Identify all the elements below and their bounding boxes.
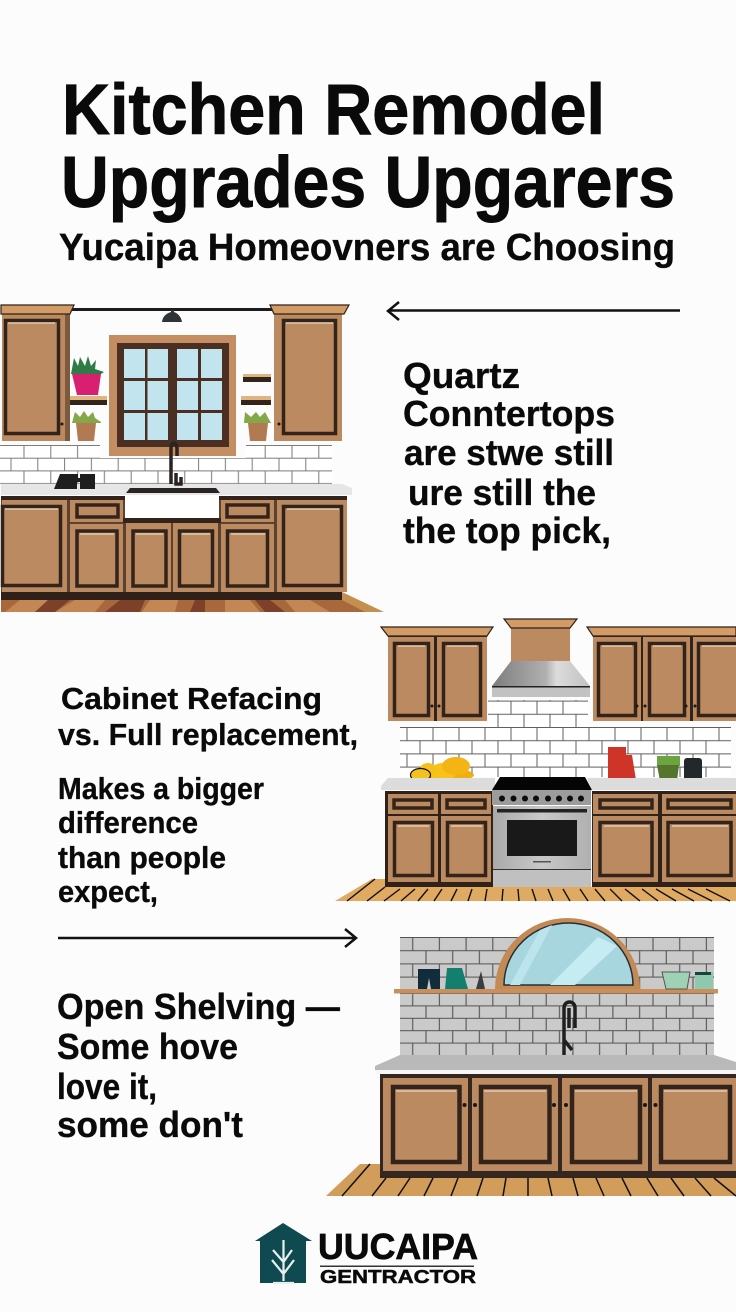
text: quartz countertops: ure still the <box>408 472 596 513</box>
illustration: kitchen with window and farmhouse sink <box>0 305 384 612</box>
text: quartz countertops: the top pick, <box>403 510 611 551</box>
shelf items right <box>662 972 713 989</box>
arrow: pointing right <box>58 929 356 947</box>
tile backsplash <box>400 700 731 777</box>
open shelf <box>394 989 718 994</box>
text: open shelving: some don't <box>57 1104 243 1145</box>
stovetop object <box>54 474 95 489</box>
text: open shelving <box>57 986 340 1145</box>
upper cabinets left <box>381 627 493 721</box>
red jug <box>608 747 636 780</box>
text: cabinet refacing <box>58 681 358 909</box>
text: cabinet refacing: Cabinet Refacing <box>61 681 322 716</box>
icon: house with tree <box>255 1223 312 1283</box>
arched mirror <box>495 918 640 989</box>
arrow: pointing left <box>388 302 680 320</box>
title: Upgrades Upgarers <box>61 143 675 223</box>
window <box>109 335 236 456</box>
plank floor <box>326 1164 736 1196</box>
text: cabinet refacing: difference <box>58 805 198 840</box>
illustration: open shelving kitchen <box>326 918 736 1196</box>
logo: GENTRACTOR <box>320 1267 476 1287</box>
text: cabinet refacing: vs. Full replacement, <box>58 717 358 752</box>
farmhouse sink <box>125 488 220 518</box>
illustration: kitchen with range and hood <box>335 619 736 901</box>
upper cabinets right <box>587 627 736 721</box>
countertop <box>1 484 352 495</box>
base cabinets <box>380 1074 736 1178</box>
countertops <box>381 778 736 790</box>
base cabinets <box>1 496 347 600</box>
plants <box>71 356 271 441</box>
gray tile wall <box>400 937 714 1055</box>
tile backsplash <box>0 445 332 484</box>
title <box>59 71 675 269</box>
text: cabinet refacing: Makes a bigger <box>58 771 264 806</box>
text: open shelving: love it, <box>57 1066 157 1107</box>
plank floor <box>335 879 736 901</box>
faucet <box>564 1002 575 1064</box>
title: Yucaipa Homeovners are Choosing <box>59 227 675 269</box>
text: quartz countertops <box>403 355 615 551</box>
bananas <box>410 757 474 782</box>
text: quartz countertops: Quartz <box>403 355 520 396</box>
shelves <box>70 374 271 405</box>
text: cabinet refacing: expect, <box>58 874 158 909</box>
upper cabinet right <box>270 305 349 441</box>
text: quartz countertops: Conntertops <box>403 393 615 434</box>
title: Kitchen Remodel <box>62 71 605 150</box>
text: cabinet refacing: than people <box>58 840 226 875</box>
text: open shelving: Open Shelving — <box>57 986 340 1027</box>
upper cabinet left <box>1 305 74 441</box>
wood floor <box>1 592 384 612</box>
base cabinets right <box>592 791 736 887</box>
stove range <box>492 777 592 889</box>
countertop <box>375 1055 736 1074</box>
base cabinets left <box>385 791 493 887</box>
text: quartz countertops: are stwe still <box>404 432 614 473</box>
green pots and canister <box>657 756 702 781</box>
light rail and lamp <box>70 308 272 322</box>
range hood <box>492 619 590 697</box>
text: open shelving: Some hove <box>57 1026 238 1067</box>
shelf items left <box>418 968 485 989</box>
faucet <box>171 443 181 484</box>
logo wordmark: UUCAIPA <box>318 1226 478 1267</box>
logo <box>255 1223 478 1287</box>
